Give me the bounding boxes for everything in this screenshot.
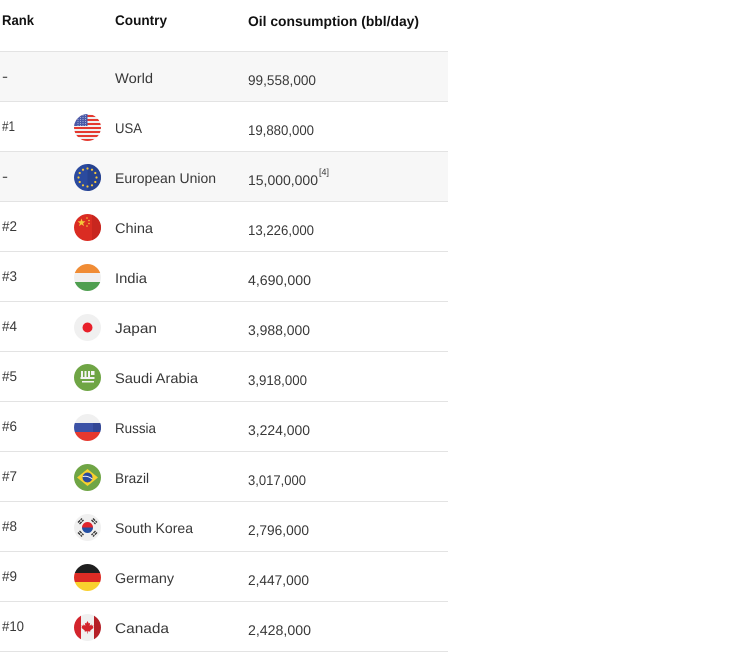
row: European Union: [4] (319, 167, 329, 177)
table header: Oil consumption (bbl/day) (248, 13, 419, 29)
icon: USA flag (74, 114, 101, 141)
icon: Japan flag (74, 314, 101, 341)
row: European Union: European Union (115, 170, 216, 186)
table header (2, 12, 419, 29)
row: China: China (115, 220, 153, 236)
row: Japan: #4 (2, 318, 17, 334)
row: Saudi Arabia: Saudi Arabia (115, 370, 198, 386)
icon: Brazil flag (74, 464, 101, 491)
row: Saudi Arabia: #5 (2, 368, 17, 384)
row: South Korea (2, 514, 309, 541)
row: USA: USA (115, 120, 143, 136)
row: India: India (115, 270, 147, 286)
icon: India flag (74, 264, 101, 291)
row: World (2, 68, 316, 88)
row: Brazil (2, 464, 306, 491)
row: World: - (2, 68, 8, 84)
row: USA (2, 114, 314, 141)
row: Saudi Arabia (2, 364, 307, 391)
row: South Korea: #8 (2, 518, 17, 534)
row: European Union: 15,000,000 (248, 172, 318, 188)
row: Germany: #9 (2, 568, 17, 584)
row: Canada (2, 614, 311, 641)
icon: China flag (74, 214, 101, 241)
row: China: #2 (2, 218, 17, 234)
icon: Russia flag (74, 414, 101, 441)
row: Japan (2, 314, 310, 341)
row: European Union: - (2, 168, 8, 184)
table header: Country (115, 12, 167, 28)
row: Japan: Japan (115, 320, 157, 336)
row: Germany (2, 564, 309, 591)
row: China (2, 214, 314, 241)
row: Japan: 3,988,000 (248, 322, 310, 338)
row: Canada: #10 (2, 618, 24, 634)
icon: Germany flag (74, 564, 101, 591)
row: South Korea: South Korea (115, 520, 193, 536)
row: European Union (2, 164, 329, 191)
row: World: 99,558,000 (248, 72, 316, 88)
row: Canada: Canada (115, 620, 169, 636)
icon: EU flag (74, 164, 101, 191)
row: Brazil: Brazil (115, 470, 149, 486)
row: India: #3 (2, 268, 17, 284)
row: Germany: Germany (115, 570, 174, 586)
row: South Korea: 2,796,000 (248, 522, 309, 538)
icon: Saudi Arabia flag (74, 364, 101, 391)
row: Brazil: 3,017,000 (248, 472, 306, 488)
row: India (2, 264, 311, 291)
icon: South Korea flag (74, 514, 101, 541)
row: Russia: 3,224,000 (248, 422, 310, 438)
row: Germany: 2,447,000 (248, 572, 309, 588)
row: India: 4,690,000 (248, 272, 311, 288)
row: Russia: Russia (115, 420, 156, 436)
row: USA: 19,880,000 (248, 122, 314, 138)
row: Canada: 2,428,000 (248, 622, 311, 638)
table header: Rank (2, 12, 34, 28)
row: Russia: #6 (2, 418, 17, 434)
icon: Canada flag (74, 614, 101, 641)
row: World: World (115, 70, 153, 86)
row: Brazil: #7 (2, 468, 17, 484)
row: USA: #1 (2, 118, 15, 134)
row: China: 13,226,000 (248, 222, 314, 238)
row: Saudi Arabia: 3,918,000 (248, 372, 307, 388)
row: Russia (2, 414, 310, 441)
